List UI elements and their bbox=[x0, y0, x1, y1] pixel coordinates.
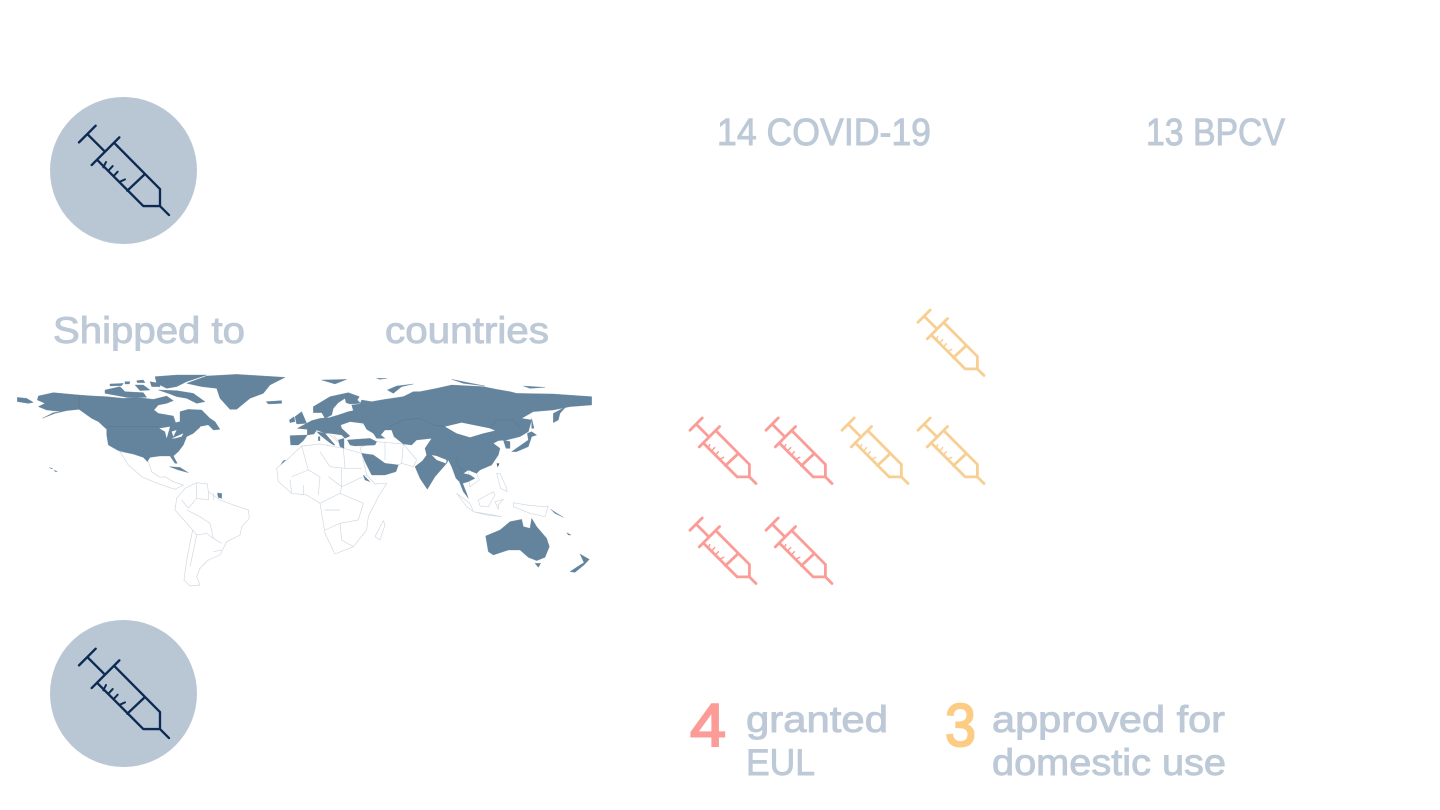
map: Africa outline bbox=[277, 444, 387, 554]
stat: 3 approved for domestic use bbox=[945, 692, 1226, 783]
icon: red syringe row 2 col 1 bbox=[690, 418, 756, 483]
world map bbox=[17, 374, 592, 586]
stat: 4 granted EUL bbox=[690, 692, 888, 783]
heading: 13 BPCV: 13 BPCV bbox=[1146, 112, 1286, 154]
icon: yellow syringe top bbox=[918, 310, 984, 375]
heading: shipped to countries: countries bbox=[385, 310, 549, 351]
map: Eurasia bbox=[289, 378, 592, 498]
stat: 3 approved for domestic use: approved for bbox=[992, 699, 1225, 740]
map: Central America outline bbox=[120, 452, 183, 489]
icon: syringe badge top bbox=[50, 97, 197, 244]
heading: shipped to countries bbox=[53, 310, 549, 351]
map: Middle East outline bbox=[330, 435, 417, 467]
icon: yellow syringe row 2 col 3 bbox=[842, 418, 908, 483]
stat: 4 granted EUL: 4 bbox=[690, 692, 726, 759]
stat: 3 approved for domestic use: 3 bbox=[945, 692, 976, 759]
stat: 4 granted EUL: EUL bbox=[746, 742, 815, 783]
heading: 14 COVID-19: 14 COVID-19 bbox=[717, 112, 931, 154]
icon: yellow syringe row 2 col 4 bbox=[918, 418, 984, 483]
heading: shipped to countries: Shipped to bbox=[53, 310, 245, 351]
icon: red syringe row 3 col 2 bbox=[766, 518, 832, 583]
icon: red syringe row 3 col 1 bbox=[690, 518, 756, 583]
stat: 3 approved for domestic use: domestic use bbox=[992, 742, 1226, 783]
map: Australia, Tasmania and New Zealand bbox=[486, 509, 589, 572]
map: South America outline bbox=[175, 483, 249, 586]
stat: 4 granted EUL: granted bbox=[746, 699, 888, 740]
icon: red syringe row 2 col 2 bbox=[766, 418, 832, 483]
icon: syringe badge bottom bbox=[50, 620, 197, 767]
map: North America, Greenland and arctic islands bbox=[17, 374, 290, 498]
map: South-East Asia islands outline bbox=[457, 473, 548, 517]
